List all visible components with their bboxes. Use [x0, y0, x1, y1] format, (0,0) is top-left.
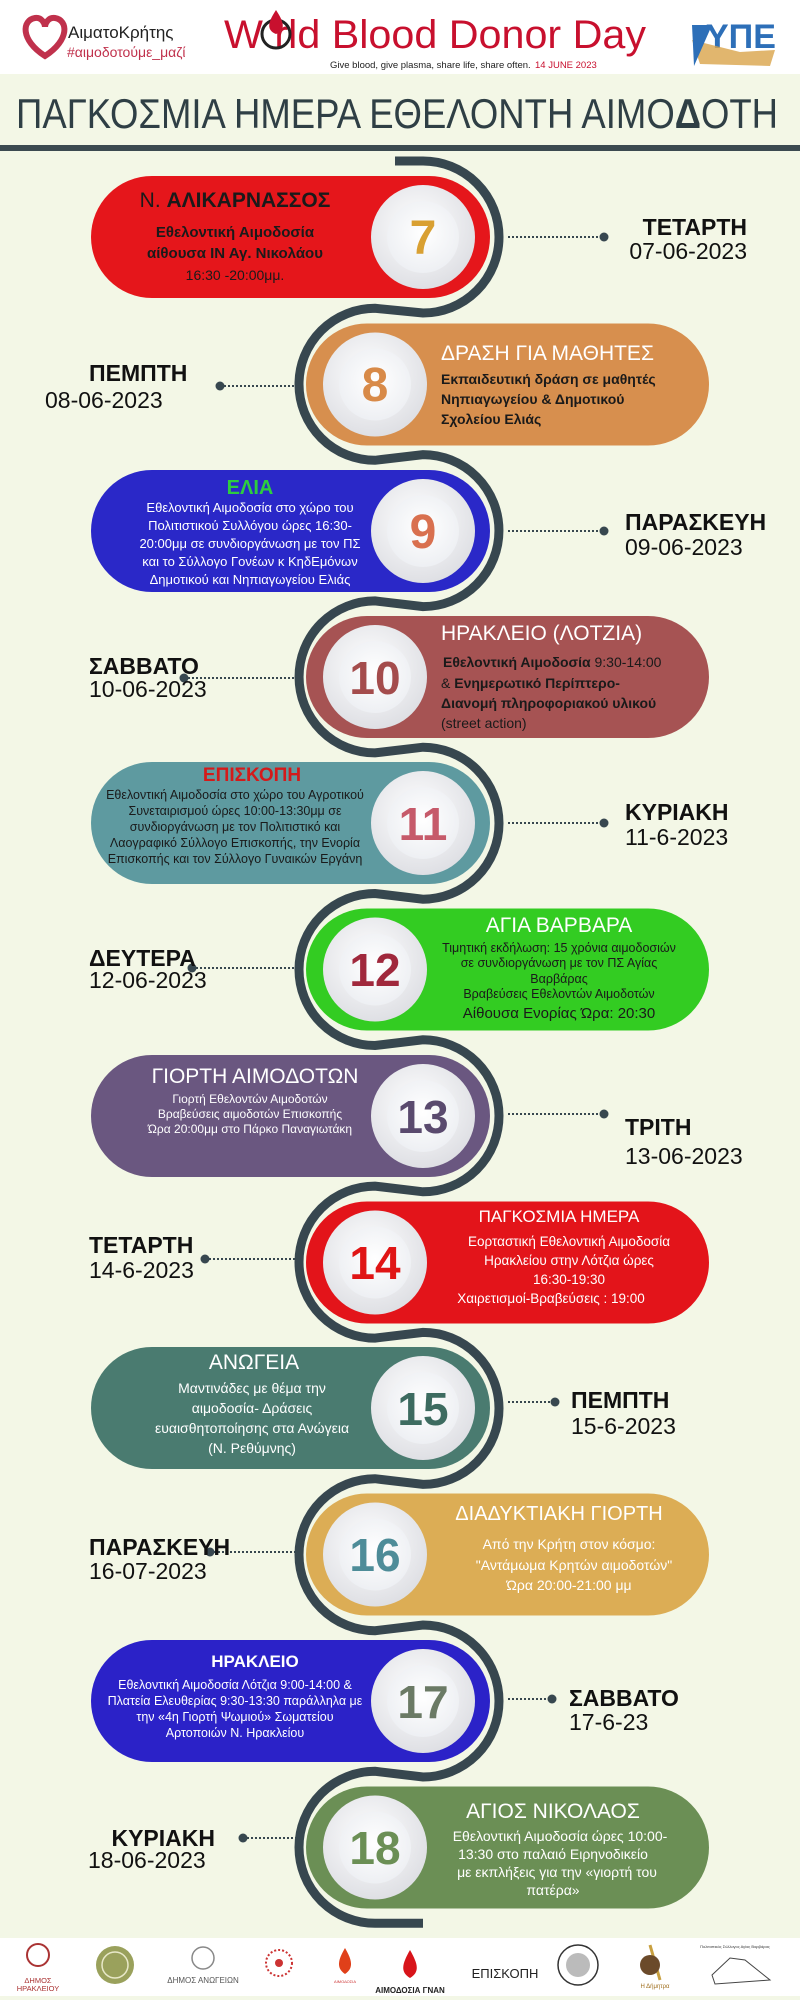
item 10: ΗΡΑΚΛΕΙΟ (ΛΟΤΖΙΑ) [441, 622, 642, 645]
item 17: ΗΡΑΚΛΕΙΟ [211, 1652, 299, 1671]
item 9: ΕΛΙΑ [227, 477, 273, 499]
item 7: Εθελοντική Αιμοδοσία [156, 224, 315, 241]
item 16: "Αντάμωμα Κρητών αιμοδοτών" [476, 1557, 672, 1573]
item 13: 13-06-2023 [625, 1143, 743, 1169]
item 11: Επισκοπής και τον Σύλλογο Γυναικών Εργάνη [108, 852, 362, 866]
item 13: Ώρα 20:00μμ στο Πάρκο Παναγιωτάκη [147, 1122, 352, 1136]
item 13: Γιορτή Εθελοντών Αιμοδοτών [172, 1092, 328, 1106]
item 14: 14 [349, 1237, 401, 1289]
item 14 [89, 1202, 709, 1324]
item 13: 13 [397, 1091, 449, 1143]
item 11: ΚΥΡΙΑΚΗ [625, 799, 729, 825]
item 10 [89, 616, 709, 738]
item 8: 08-06-2023 [45, 387, 163, 413]
logo: cultural association map [700, 1944, 770, 1984]
item 10: ΣΑΒΒΑΤΟ [89, 653, 199, 679]
logo: Dimos Irakleiou [17, 1944, 59, 1993]
title: ΠΑΓΚΟΣΜΙΑ ΗΜΕΡΑ ΕΘΕΛΟΝΤΗ ΑΙΜΟΔΟΤΗ [16, 90, 778, 137]
item 16: ΠΑΡΑΣΚΕΥΗ [89, 1534, 230, 1560]
item 18: Εθελοντική Αιμοδοσία ώρες 10:00- [453, 1828, 668, 1844]
item 15: αιμοδοσία- Δράσεις [192, 1400, 312, 1416]
item 8: ΠΕΜΠΤΗ [89, 360, 187, 386]
item 10: (street action) [441, 715, 527, 731]
item 9: ΠΑΡΑΣΚΕΥΗ [625, 509, 766, 535]
item 17: Εθελοντική Αιμοδοσία Λότζια 9:00-14:00 & [118, 1678, 353, 1692]
logo: Aimodosia GNAN [375, 1950, 445, 1995]
item 11: 11-6-2023 [625, 824, 728, 850]
item 12: ΑΓΙΑ ΒΑΡΒΑΡΑ [486, 914, 632, 937]
logo: wheat: Η Δήμητρα [640, 1983, 670, 1990]
logo: World Blood Donor Day: Give blood, give plasma, share life, share often. [330, 60, 531, 71]
item 17: 17-6-23 [569, 1709, 648, 1735]
item 10: & Ενημερωτικό Περίπτερο- [441, 675, 620, 691]
logo: Dimos Anogeion: ΔΗΜΟΣ ΑΝΩΓΕΙΩΝ [167, 1976, 239, 1985]
item 9: Εθελοντική Αιμοδοσία στο χώρο του [146, 500, 354, 515]
logo: AimatoKritis: #αιμοδοτούμε_μαζί [67, 44, 186, 60]
item 18: ΑΓΙΟΣ ΝΙΚΟΛΑΟΣ [466, 1800, 640, 1823]
item 11: 11 [399, 798, 447, 850]
item 11 [91, 762, 729, 884]
item 10: 10 [349, 652, 401, 704]
logo: olive circle [96, 1946, 134, 1984]
item 13: ΤΡΙΤΗ [625, 1114, 691, 1140]
item 17: Πλατεία Ελευθερίας 9:30-13:30 παράλληλα με [108, 1694, 363, 1708]
logo: Dimos Irakleiou: ΔΗΜΟΣ [24, 1976, 52, 1985]
logo: Aimodosia GNAN: ΑΙΜΟΔΟΣΙΑ ΓΝΑΝ [375, 1986, 445, 1995]
item 11: συνδιοργάνωση με τον Πολιτιστικό και [130, 820, 340, 834]
item 16: ΔΙΑΔΥΚΤΙΑΚΗ ΓΙΟΡΤΗ [455, 1503, 663, 1525]
header band [0, 0, 800, 74]
item 12: σε συνδιοργάνωση με τον ΠΣ Αγίας [461, 956, 657, 970]
item 16: Ώρα 20:00-21:00 μμ [505, 1577, 632, 1593]
item 9: 9 [410, 506, 436, 559]
logo: Dimos Anogeion [167, 1947, 239, 1985]
item 7: Ν. ΑΛΙΚΑΡΝΑΣΣΟΣ [140, 189, 330, 212]
item 11: Λαογραφικό Σύλλογο Επισκοπής, την Ενορία [110, 836, 360, 850]
logo: round seal [558, 1945, 598, 1985]
item 10: Διανομή πληροφοριακού υλικού [441, 695, 656, 711]
item 9: 20:00μμ σε συνδιοργάνωση με τον ΠΣ [139, 536, 361, 551]
item 18: 18 [349, 1822, 401, 1874]
item 12: ΔΕΥΤΕΡΑ [89, 945, 196, 971]
item 14: Εορταστική Εθελοντική Αιμοδοσία [468, 1234, 670, 1249]
item 16: 16-07-2023 [89, 1558, 207, 1584]
item 14: Χαιρετισμοί-Βραβεύσεις : 19:00 [457, 1291, 645, 1306]
item 11: ΕΠΙΣΚΟΠΗ [203, 765, 301, 786]
item 15 [91, 1347, 676, 1469]
item 9: Πολιτιστικού Συλλόγου ώρες 16:30- [148, 518, 352, 533]
item 12: 12 [349, 944, 401, 996]
item 8: Εκπαιδευτική δράση σε μαθητές [441, 371, 656, 387]
item 13: ΓΙΟΡΤΗ ΑΙΜΟΔΟΤΩΝ [152, 1065, 358, 1088]
item 9: 09-06-2023 [625, 534, 743, 560]
logo: Episkopi: ΕΠΙΣΚΟΠΗ [472, 1966, 538, 1981]
item 12: Τιμητική εκδήλωση: 15 χρόνια αιμοδοσιών [442, 941, 676, 955]
item 15: ευαισθητοποίησης στα Ανώγεια [155, 1420, 349, 1436]
logo: YPE: ΥΠΕ [706, 18, 776, 56]
item 7: 16:30 -20:00μμ. [186, 267, 284, 283]
item 12: 12-06-2023 [89, 967, 207, 993]
logo: YPE [692, 18, 776, 66]
logo: World Blood Donor Day: W rld Blood Donor Day [224, 13, 646, 57]
item 14: ΤΕΤΑΡΤΗ [89, 1232, 193, 1258]
logo: AimatoKritis: ΑιματοΚρήτης [68, 23, 174, 42]
logo: blood drop flame [334, 1948, 356, 1984]
item 16: 16 [349, 1529, 401, 1581]
item 12: Αίθουσα Ενορίας Ώρα: 20:30 [463, 1005, 655, 1022]
item 15: ΠΕΜΠΤΗ [571, 1387, 669, 1413]
item 9 [91, 470, 766, 592]
item 8: ΔΡΑΣΗ ΓΙΑ ΜΑΘΗΤΕΣ [441, 342, 654, 365]
item 10: Εθελοντική Αιμοδοσία 9:30-14:00 [443, 654, 662, 670]
item 14: 14-6-2023 [89, 1257, 194, 1283]
item 9: και το Σύλλογο Γονέων κ ΚηδΕμόνων [142, 554, 358, 569]
logo: red ring [266, 1950, 292, 1976]
item 11: Εθελοντική Αιμοδοσία στο χώρο του Αγροτικού [106, 788, 364, 802]
item 15: (Ν. Ρεθύμνης) [208, 1440, 296, 1456]
item 12 [89, 908, 709, 1030]
item 12: Βραβεύσεις Εθελοντών Αιμοδοτών [463, 987, 655, 1001]
footer sponsor logos [0, 1938, 800, 1996]
item 15: 15-6-2023 [571, 1413, 676, 1439]
item 7: αίθουσα ΙΝ Αγ. Νικολάου [147, 245, 323, 262]
item 18: πατέρα» [526, 1882, 580, 1898]
item 8: 8 [362, 359, 388, 412]
logo: AimatoKritis [26, 18, 186, 60]
item 7 [91, 176, 747, 298]
item 18: ΚΥΡΙΑΚΗ [111, 1825, 215, 1851]
item 17: την «4η Γιορτή Ψωμιού» Σωματείου [136, 1710, 334, 1724]
item 17 [91, 1640, 679, 1762]
item 8: Σχολείου Ελιάς [441, 411, 541, 427]
item 13: Βραβεύσεις αιμοδοτών Επισκοπής [158, 1107, 342, 1121]
item 12: Βαρβάρας [530, 972, 588, 986]
logo: blood drop flame: ΑΙΜΟΔΟΣΙΑ [334, 1979, 356, 1984]
item 7: 07-06-2023 [629, 238, 747, 264]
item 18 [88, 1786, 709, 1908]
item 14: 16:30-19:30 [533, 1272, 605, 1287]
logo: cultural association map: Πολιτιστικός Σύλλογος Αγίας Βαρβάρας [700, 1944, 770, 1949]
item 18: 13:30 στο παλαιό Ειρηνοδικείο [458, 1846, 648, 1862]
item 18: 18-06-2023 [88, 1847, 206, 1873]
snake timeline line [299, 161, 499, 1923]
item 8 [45, 324, 709, 446]
item 16: Από την Κρήτη στον κόσμο: [483, 1536, 655, 1552]
logo: Dimos Irakleiou: ΗΡΑΚΛΕΙΟΥ [17, 1984, 59, 1993]
item 17: Αρτοποιών Ν. Ηρακλείου [166, 1726, 304, 1740]
item 17: ΣΑΒΒΑΤΟ [569, 1685, 679, 1711]
item 15: Μαντινάδες με θέμα την [178, 1380, 326, 1396]
item 8: Νηπιαγωγείου & Δημοτικού [441, 391, 624, 407]
item 9: Δημοτικού και Νηπιαγωγείου Ελιάς [150, 572, 350, 587]
item 18: με εκπλήξεις για την «γιορτή του [457, 1864, 657, 1880]
item 14: Ηρακλείου στην Λότζια ώρες [484, 1253, 654, 1268]
item 13 [91, 1055, 743, 1177]
item 7: ΤΕΤΑΡΤΗ [643, 214, 747, 240]
item 15: 15 [397, 1383, 449, 1435]
item 10: 10-06-2023 [89, 676, 207, 702]
logo: World Blood Donor Day: 14 JUNE 2023 [535, 60, 597, 71]
item 16 [89, 1494, 709, 1616]
logo: wheat [640, 1945, 670, 1990]
item 14: ΠΑΓΚΟΣΜΙΑ ΗΜΕΡΑ [479, 1207, 640, 1226]
item 15: ΑΝΩΓΕΙΑ [209, 1351, 299, 1374]
item 11: Συνεταιρισμού ώρες 10:00-13:30μμ σε [128, 804, 342, 818]
item 17: 17 [397, 1676, 449, 1728]
logo: World Blood Donor Day [224, 10, 646, 71]
item 7: 7 [410, 212, 436, 265]
